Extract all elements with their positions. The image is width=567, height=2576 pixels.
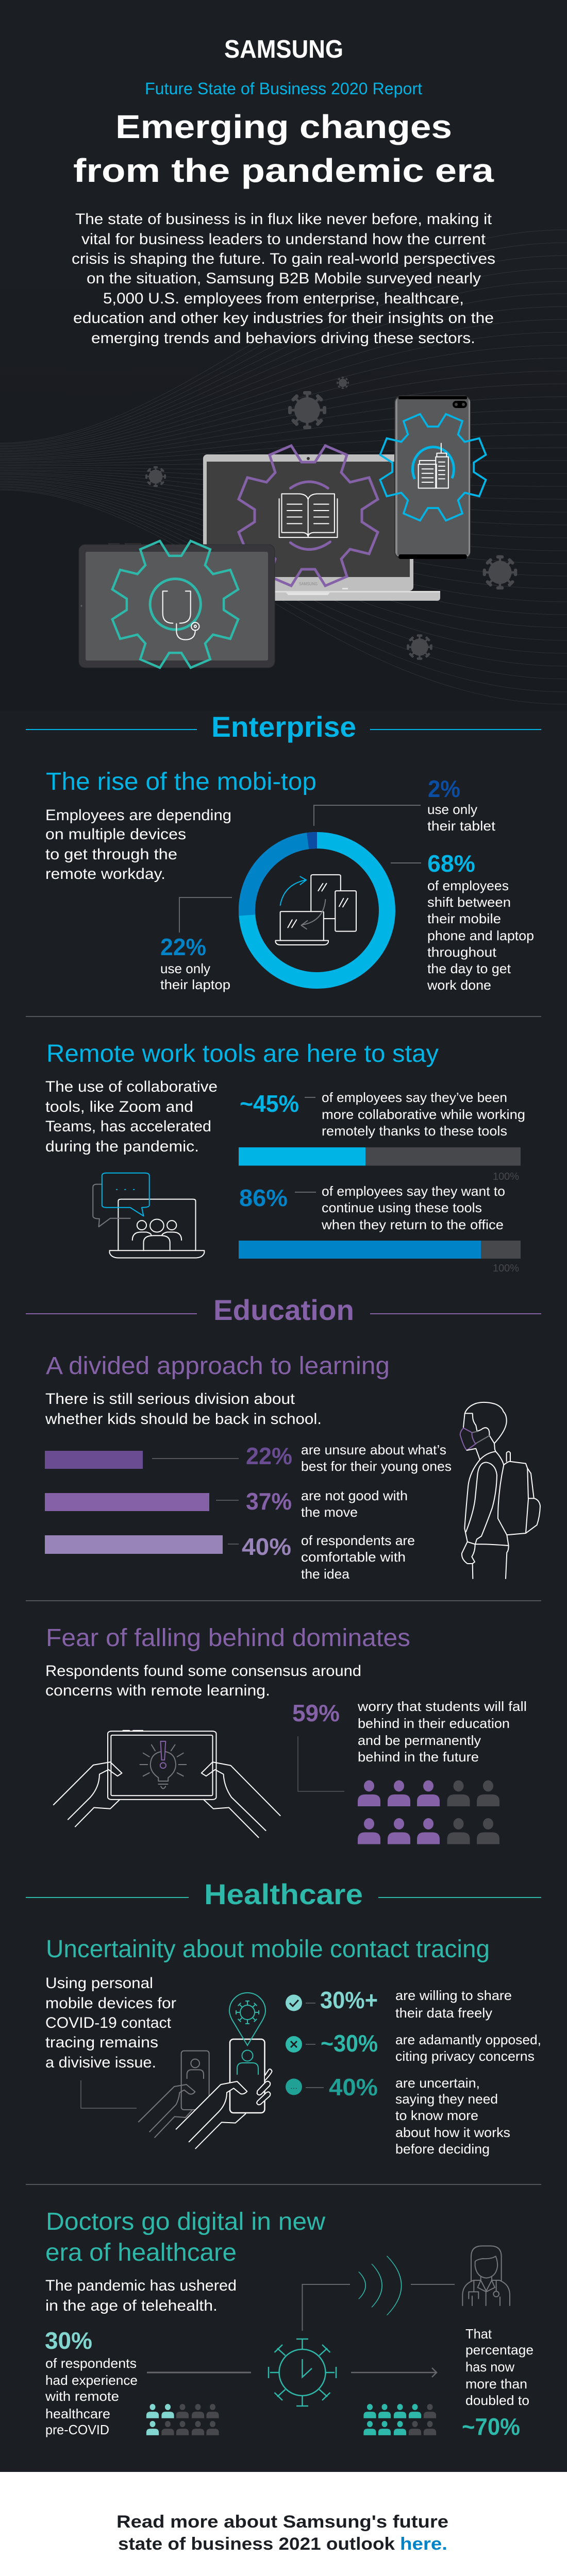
stat: 40% uncertain: before deciding: [395, 2141, 490, 2157]
stat: 86%: [239, 1183, 505, 1232]
heading: The rise of the mobi-top: [46, 768, 316, 795]
body text: [45, 1975, 176, 2071]
stat: 59%: [292, 1699, 527, 1765]
stat: 30%+ willing: 30%+: [320, 1987, 378, 2013]
stat: 40% uncertain: are uncertain,: [395, 2075, 480, 2091]
body text: tracing remains: [45, 2034, 158, 2051]
icon: video call laptop: [93, 1173, 204, 1258]
leader line: [81, 2080, 137, 2108]
pictogram: 7 of 10 people: [363, 2404, 436, 2435]
body text: a divisive issue.: [45, 2054, 156, 2071]
bar row: 40%: [45, 1533, 415, 1582]
body text: mobile devices for: [45, 1995, 176, 2012]
title: Emerging changes: [115, 108, 452, 145]
icon: signal waves: [359, 2256, 402, 2315]
stat: 40% uncertain: saying they need: [395, 2091, 498, 2107]
stat: 59%: 59%: [292, 1700, 340, 1726]
call to action: state of business 2021 outlook: [118, 2534, 395, 2554]
bar row: 22%: best for their young ones: [301, 1459, 452, 1474]
stat: 30% pre-COVID: pre-COVID: [45, 2422, 109, 2437]
icon: hands holding tablet: [54, 1731, 280, 1838]
tablet: [79, 543, 275, 668]
icon: clock virus: [269, 2339, 336, 2406]
call to action: Read more about Samsung's future: [116, 2512, 448, 2532]
stat: 45%: of employees say they’ve been: [322, 1090, 507, 1105]
donut chart: [247, 840, 387, 980]
body text: to get through the: [45, 846, 177, 863]
stat: 30% opposed: are adamantly opposed,: [395, 2032, 541, 2047]
icon: stethoscope: [150, 579, 201, 640]
leader line: [298, 1736, 344, 1791]
stat: 22%: 22%: [160, 934, 206, 960]
stat: 30%+ willing: their data freely: [395, 2005, 492, 2021]
stat: 68%: throughout: [427, 944, 497, 960]
phone: [394, 395, 472, 559]
stat: 68%: 68%: [427, 850, 475, 877]
bar row: 22%: 22%: [246, 1443, 292, 1469]
background flowing lines: [0, 230, 567, 704]
stat: 2%: their tablet: [427, 818, 496, 834]
stat: 86%: of employees say they want to: [322, 1183, 505, 1199]
intro text: [72, 211, 495, 347]
white hand: [176, 2069, 272, 2148]
heading: Fear of falling behind dominates: [46, 1624, 410, 1652]
hero background: [0, 258, 567, 711]
bar row: 22%: [45, 1442, 452, 1474]
bar row: 40%: of respondents are: [301, 1533, 415, 1548]
body text: COVID-19 contact: [45, 2014, 172, 2031]
intro text: crisis is shaping the future. To gain real-world perspectives: [72, 250, 495, 267]
section heading: Healthcare: [204, 1878, 363, 1910]
stat: 2%: [427, 775, 496, 834]
body text: [45, 2277, 237, 2314]
heading: A divided approach to learning: [46, 1352, 390, 1380]
stat: 45%: remotely thanks to these tools: [322, 1123, 507, 1139]
stat: 30% pre-COVID: with remote: [45, 2388, 119, 2404]
gear: enterprise: [380, 414, 486, 520]
body text: concerns with remote learning.: [45, 1682, 270, 1699]
icon: building: [412, 443, 454, 488]
stat: 86%: continue using these tools: [322, 1200, 482, 1215]
heading: [45, 2208, 325, 2266]
bar row: 40%: 40%: [242, 1533, 291, 1560]
stat: 2%: use only: [427, 802, 477, 817]
section: Enterprise: [26, 710, 541, 1274]
bar row: 37%: are not good with: [301, 1488, 408, 1503]
intro text: The state of business is in flux like never before, making it: [75, 211, 492, 228]
call to action: [116, 2512, 448, 2554]
stat: 30% pre-COVID: had experience: [45, 2372, 138, 2388]
stat: 40% uncertain: to know more: [395, 2108, 478, 2123]
intro text: emerging trends and behaviors driving these sectors.: [91, 330, 475, 347]
call to action: here.: [400, 2534, 447, 2554]
stat: 30% pre-COVID: of respondents: [45, 2355, 137, 2371]
grey phone and hand: [138, 2051, 209, 2138]
connector: to clock: [147, 2372, 251, 2373]
heading: era of healthcare: [45, 2239, 237, 2266]
icon: virus left: [145, 466, 166, 487]
report subtitle: Future State of Business 2020 Report: [145, 79, 422, 98]
stat: 30%+ willing: [286, 1987, 512, 2021]
stat: 30% opposed: [286, 2030, 541, 2064]
stat: 59%: and be permanently: [358, 1733, 481, 1748]
stat: 22%: use only: [160, 961, 210, 976]
stat: 45%: more collaborative while working: [322, 1107, 525, 1122]
body text: [45, 1078, 218, 1155]
stat: 40% uncertain: about how it works: [395, 2125, 510, 2140]
stat: 70%: has now: [465, 2359, 514, 2375]
leader lines: [179, 805, 421, 933]
section heading: Education: [213, 1294, 354, 1326]
gear: healthcare: [112, 541, 238, 668]
pictogram: 6 of 10 people: [358, 1781, 499, 1844]
connector: signal to doctor: [411, 2284, 455, 2285]
intro text: on the situation, Samsung B2B Mobile surveyed nearly: [87, 270, 481, 287]
white phone: [230, 2039, 265, 2113]
body text: [45, 1391, 322, 1428]
stat: 45%: ~45%: [240, 1090, 299, 1117]
laptop: [176, 454, 440, 601]
bar: 45%: 100%: [493, 1171, 519, 1182]
panel: mobi-top: [45, 768, 534, 993]
icon: student with mask and backpack: [460, 1402, 540, 1579]
footer panel: [0, 2472, 567, 2576]
body text: whether kids should be back in school.: [45, 1411, 322, 1428]
bar: 86%: 100%: [493, 1263, 519, 1274]
stat: 30%+ willing: are willing to share: [395, 1988, 512, 2003]
body text: during the pandemic.: [45, 1138, 199, 1155]
panel: remote work tools: [45, 1040, 525, 1274]
heading: Doctors go digital in new: [46, 2208, 325, 2235]
body text: Employees are depending: [45, 807, 231, 824]
stat: 86%: when they return to the office: [321, 1217, 504, 1232]
stat: 70%: percentage: [465, 2342, 533, 2358]
stat: 70%: That: [465, 2326, 492, 2342]
panel: fear of falling behind: [45, 1624, 527, 1844]
bar row: 22%: are unsure about what’s: [301, 1442, 446, 1458]
icon: virus small: [337, 377, 349, 389]
stat: 40% uncertain: ...: [290, 2084, 297, 2090]
stat: 68%: phone and laptop: [427, 928, 534, 943]
icon: virus large: [288, 391, 326, 429]
stat: 30% pre-COVID: [45, 2327, 138, 2437]
icon: virus lower: [407, 634, 432, 660]
stat: 68%: of employees: [427, 878, 509, 893]
stat: 40% uncertain: 40%: [329, 2074, 378, 2100]
stat: 30% opposed: ~30%: [321, 2030, 378, 2057]
icon: devices: [276, 875, 356, 945]
bar row: 37%: 37%: [246, 1488, 292, 1515]
body text: Using personal: [45, 1975, 153, 1992]
stat: 30% pre-COVID: healthcare: [45, 2406, 110, 2421]
stat: 70%: doubled to: [465, 2393, 529, 2408]
gear: education: [239, 446, 378, 586]
body text: The pandemic has ushered: [45, 2277, 237, 2294]
body text: [45, 807, 231, 883]
stat: 40% uncertain: [286, 2074, 510, 2157]
stat: 45%: [240, 1090, 525, 1139]
intro text: vital for business leaders to understand how the current: [81, 231, 486, 248]
stat: 68%: their mobile: [427, 911, 501, 926]
section: Education: [26, 1294, 541, 1844]
title: [73, 108, 494, 189]
heading: Uncertainity about mobile contact tracing: [46, 1936, 490, 1963]
body text: [45, 1663, 361, 1699]
stat: 68%: shift between: [427, 894, 511, 910]
body text: in the age of telehealth.: [45, 2297, 218, 2314]
stat: 22%: [160, 934, 230, 992]
icon: doctor: [462, 2246, 510, 2306]
stat: 70%: ~70%: [462, 2413, 520, 2440]
panel: contact tracing: [45, 1936, 541, 2157]
bar row: 37%: the move: [301, 1504, 358, 1520]
pictogram: 3 of 10 people: [146, 2404, 219, 2435]
bar row: 40%: comfortable with: [301, 1549, 406, 1565]
logo: Samsung: SAMSUNG: [224, 36, 343, 63]
stat: 68%: [427, 850, 534, 993]
body text: The use of collaborative: [45, 1078, 218, 1095]
section: Healthcare: [26, 1878, 541, 2440]
icon: book: [279, 482, 337, 549]
stat: 59%: behind in their education: [358, 1716, 510, 1731]
stat: 68%: the day to get: [427, 961, 511, 976]
connector: clock to signal: [302, 2284, 350, 2331]
body text: There is still serious division about: [45, 1391, 295, 1408]
bar: 86%: [239, 1241, 521, 1274]
body text: remote workday.: [45, 866, 165, 883]
bar row: 40%: the idea: [301, 1566, 350, 1582]
section heading: Enterprise: [211, 710, 356, 743]
stat: 86%: 86%: [239, 1184, 288, 1211]
stat: 70%: more than: [465, 2376, 527, 2392]
icon: contact tracing phones: [138, 1993, 272, 2148]
body text: Teams, has accelerated: [45, 1118, 211, 1135]
bar row: 37%: [45, 1488, 408, 1520]
panel: divided approach: [45, 1352, 540, 1582]
arrow: to 70%: [351, 2368, 437, 2377]
bar: 45%: [239, 1147, 521, 1182]
heading: Remote work tools are here to stay: [46, 1040, 439, 1067]
body text: Respondents found some consensus around: [45, 1663, 361, 1680]
intro text: 5,000 U.S. employees from enterprise, healthcare,: [103, 290, 464, 307]
stat: 2%: 2%: [428, 775, 460, 802]
stat: 68%: work done: [427, 977, 491, 993]
title: from the pandemic era: [73, 152, 494, 189]
stat: 22%: their laptop: [160, 977, 230, 992]
intro text: education and other key industries for their insights on the: [73, 310, 494, 327]
location pin with virus: [229, 1993, 265, 2075]
body text: tools, like Zoom and: [45, 1098, 193, 1115]
stat: 70%: [462, 2326, 533, 2440]
laptop: SAMSUNG: [299, 582, 318, 586]
stat: 30% pre-COVID: 30%: [45, 2327, 92, 2354]
stat: 30% opposed: citing privacy concerns: [395, 2048, 535, 2064]
hero illustration: devices with gears: [79, 377, 517, 668]
panel: doctors go digital: [45, 2208, 533, 2440]
stat: 59%: behind in the future: [358, 1749, 479, 1765]
body text: on multiple devices: [45, 826, 186, 843]
icon: virus right: [483, 555, 517, 589]
stat: 59%: worry that students will fall: [357, 1699, 527, 1714]
